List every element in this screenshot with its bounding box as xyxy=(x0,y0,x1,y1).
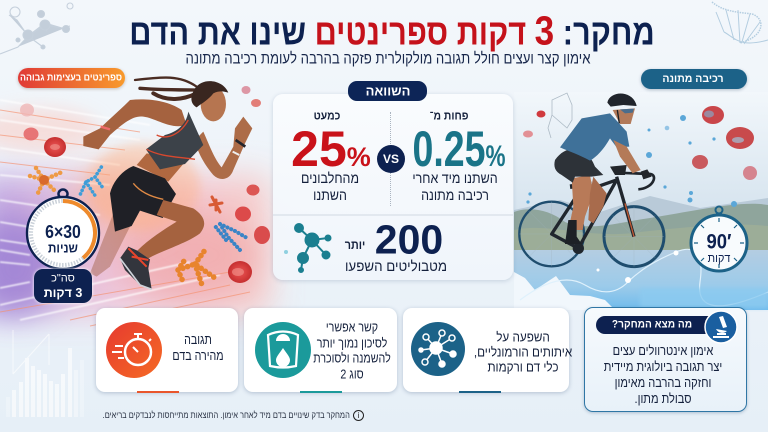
cyclist xyxy=(519,94,664,267)
icon: fast stopwatch xyxy=(106,322,162,378)
accent xyxy=(137,391,179,393)
footnote xyxy=(103,410,364,421)
stopwatch: 90 minutes: 90′ xyxy=(707,230,731,254)
text: יצר תגובה ביולוגית מיידית xyxy=(604,359,722,374)
badge: comparison xyxy=(348,81,427,101)
stat: 25% caption xyxy=(301,171,359,204)
badge: comparison: השוואה xyxy=(366,84,410,98)
text: סוג 2 xyxy=(340,367,364,382)
blood cells and molecules right xyxy=(523,93,757,207)
text xyxy=(604,343,722,406)
text: איתותים הורמונליים, xyxy=(474,344,572,360)
red blood cells left xyxy=(20,86,270,283)
title: מחקר: 3 דקות ספרינטים שינו את הדם xyxy=(129,8,655,54)
stat: 25% intro: כמעט xyxy=(314,110,340,122)
text xyxy=(172,332,224,363)
stat: more than label: יותר xyxy=(345,238,365,252)
stat: 0.25% caption: השתנו מיד אחרי xyxy=(412,171,498,187)
icon: info: i xyxy=(358,411,359,420)
subtitle: אימון קצר ועצים חולל תגובה מולקולרית פזקה בהרבה לעומת רכיבה מתונה xyxy=(186,50,590,67)
stat: 200 number: 200 xyxy=(375,216,443,262)
badge: VS xyxy=(377,145,405,173)
header pill: מה מצא המחקר? xyxy=(612,318,692,330)
card: obesity and diabetes risk xyxy=(244,308,397,392)
stopwatch: 90 minutes: דקות xyxy=(708,251,730,265)
accent xyxy=(300,391,342,393)
pill: moderate cycling: רכיבה מתונה xyxy=(662,73,724,85)
right landscape background xyxy=(514,92,768,310)
panel: comparison xyxy=(273,94,513,280)
icon: scale and drop xyxy=(255,322,311,378)
text: כלי דם ורקמות xyxy=(487,360,559,374)
card: fast response xyxy=(96,308,238,392)
badge: total 3 minutes: סה"כ xyxy=(51,272,75,284)
text: אימון אינטרוולים עצים xyxy=(613,343,713,358)
decorative DNA top right xyxy=(712,2,768,44)
text: וחזקה בהרבה מאימון xyxy=(615,375,711,390)
text: תגובה xyxy=(184,332,212,347)
header pill xyxy=(596,316,716,334)
pill: moderate cycling xyxy=(641,69,747,89)
divider: vertical dotted xyxy=(390,112,391,206)
stopwatch: 6×30 seconds: שניות xyxy=(48,240,78,256)
icon: molecule xyxy=(284,223,332,273)
badge: total 3 minutes xyxy=(34,269,92,303)
text: השפעה על xyxy=(496,330,550,344)
text xyxy=(313,320,391,382)
text: להשמנה ולסוכרת xyxy=(313,351,391,366)
text: קשר אפשרי xyxy=(326,320,378,335)
stat: 25 percent: 25% xyxy=(291,121,371,177)
runner xyxy=(83,78,252,289)
stopwatch: 90 minutes xyxy=(690,206,748,272)
badge: total 3 minutes: 3 דקות xyxy=(44,286,82,300)
left energy background xyxy=(0,100,270,417)
stopwatch: 6×30 seconds: 6×30 xyxy=(45,222,81,242)
divider: horizontal xyxy=(273,214,513,216)
decorative molecule top left xyxy=(0,3,73,54)
stopwatch: 6×30 seconds xyxy=(26,188,100,269)
stat: 25% caption: מהחלבונים xyxy=(301,171,359,187)
stat: 0.25% intro: פחות מ־ xyxy=(430,110,468,122)
text: סבולת מתון. xyxy=(634,391,692,406)
badge: VS: VS xyxy=(383,152,399,166)
icon: network xyxy=(411,322,465,376)
stat: metabolites caption: מטבוליטים השפעו xyxy=(345,259,447,275)
text: מהירה בדם xyxy=(172,348,224,363)
pill: high intensity sprints xyxy=(18,68,125,88)
text: לסיכון נמוך יותר xyxy=(317,335,387,350)
stat: 0.25% caption xyxy=(412,171,498,204)
accent xyxy=(459,391,501,393)
stat: 25% caption: השתנו xyxy=(313,188,347,204)
icon: microscope xyxy=(704,310,738,344)
card: hormones and vessels xyxy=(403,308,569,392)
icon: info xyxy=(353,410,364,421)
stat: 0.25 percent: 0.25% xyxy=(412,121,505,177)
text xyxy=(474,330,572,374)
text: המחקר בדק שינויים בדם מיד לאחר אימון. התוצאות מתייחסות לנבדקים בריאים. xyxy=(103,410,350,420)
left bar chart decoration xyxy=(6,330,84,417)
stat: 0.25% caption: רכיבה מתונה xyxy=(421,188,489,204)
pill: high intensity sprints: ספרינטים בעצימות גבוהה xyxy=(20,72,122,83)
panel: what the study found xyxy=(584,307,747,412)
molecules left xyxy=(30,166,247,285)
